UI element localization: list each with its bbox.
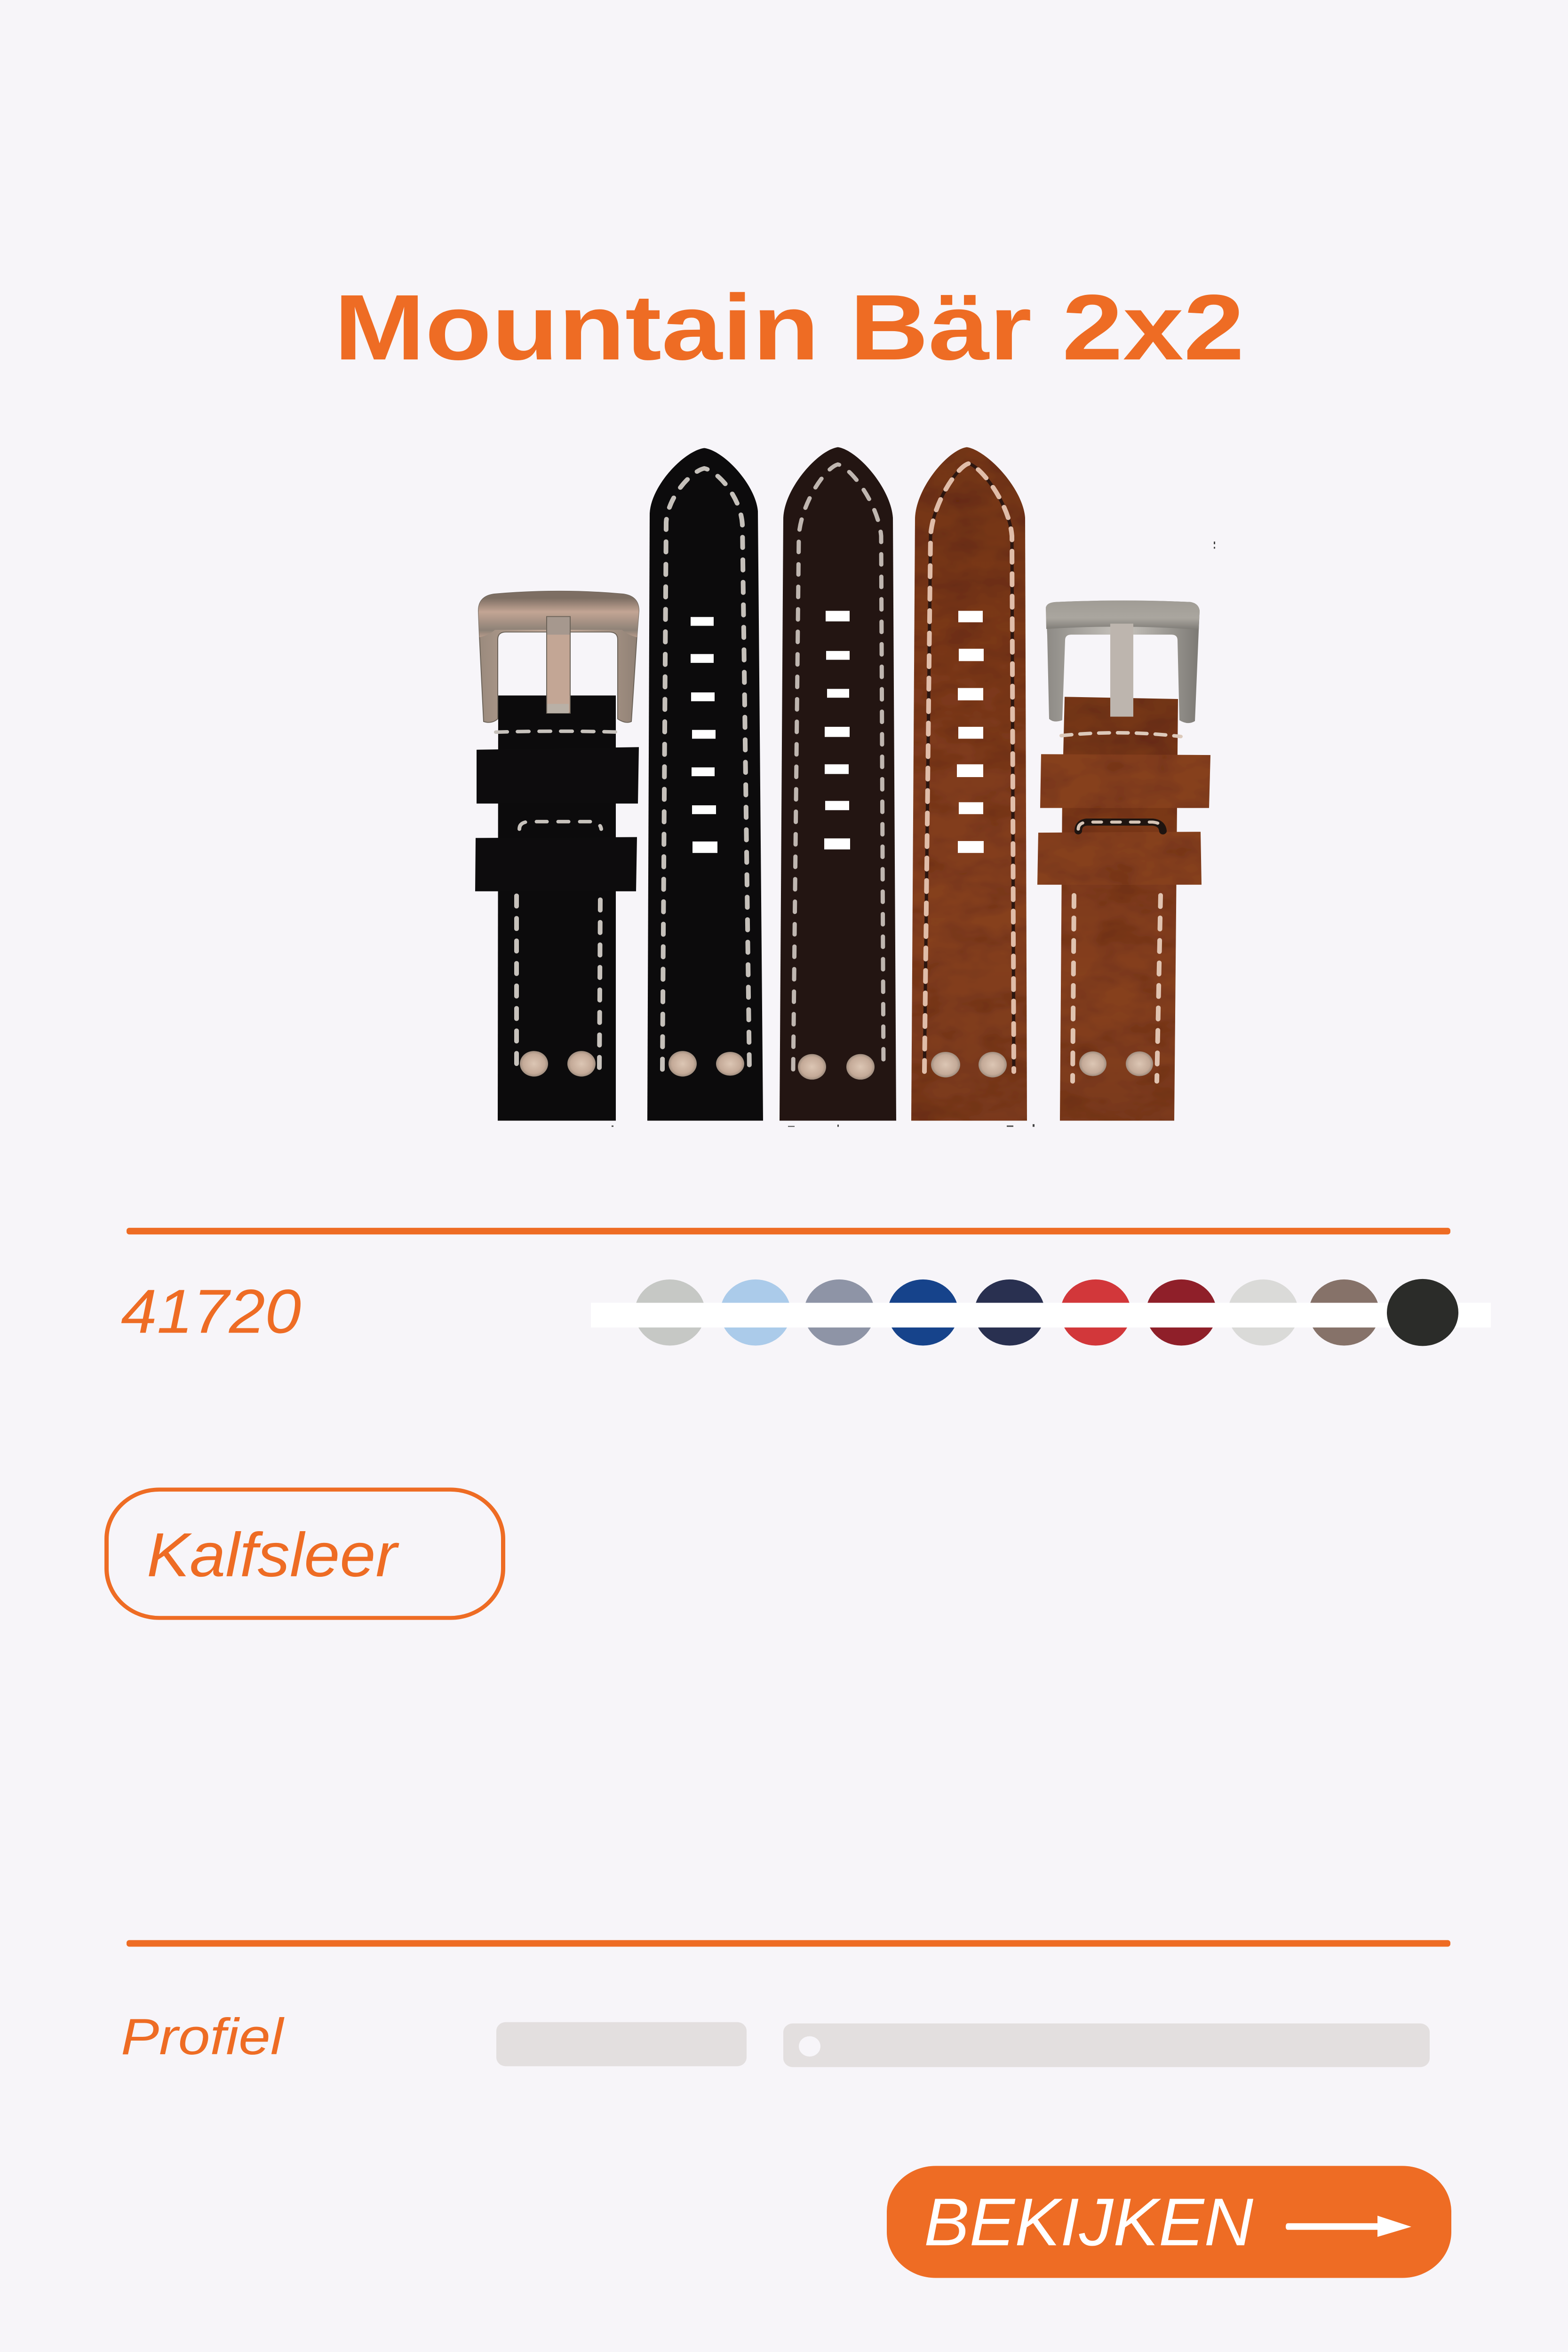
strap: long tan brown <box>911 447 1027 1120</box>
stitching <box>924 463 1014 1072</box>
divider bottom <box>127 1940 1450 1947</box>
stitching <box>496 731 620 1073</box>
buckle slots <box>691 617 717 853</box>
material tag <box>106 1490 503 1618</box>
stray scan specks <box>612 541 1215 1127</box>
divider top <box>127 1228 1450 1234</box>
stitching <box>1061 733 1181 1081</box>
colour swatches <box>591 1279 1491 1346</box>
arrow <box>1286 2216 1411 2237</box>
title: Mountain Bär 2x2 <box>334 276 1244 380</box>
stitching <box>793 464 883 1070</box>
strap: long dark brown <box>780 447 896 1120</box>
button <box>887 2166 1451 2278</box>
article number: 41720 <box>121 1276 301 1346</box>
strap: long black <box>647 448 763 1120</box>
product photo: five leather straps <box>475 447 1215 1127</box>
rivets <box>669 1051 744 1077</box>
stitching <box>662 469 749 1070</box>
keepers <box>475 747 639 891</box>
material tag: Kalfsleer <box>147 1520 399 1589</box>
profile shape: short <box>496 2022 747 2066</box>
rivets <box>798 1054 875 1080</box>
rivets <box>520 1051 596 1077</box>
profile shape: long <box>783 2024 1430 2067</box>
strap: short black with buckle <box>475 591 639 1120</box>
strap: short tan brown with buckle <box>1037 600 1210 1120</box>
buckle <box>1046 600 1200 723</box>
rivets <box>1079 1051 1153 1076</box>
keepers <box>1037 754 1210 885</box>
profile label: Profiel <box>121 2008 285 2065</box>
button: BEKIJKEN <box>924 2185 1254 2260</box>
buckle slots <box>824 611 850 850</box>
rivets <box>931 1052 1007 1077</box>
buckle slots <box>957 611 984 853</box>
buckle <box>478 591 639 723</box>
